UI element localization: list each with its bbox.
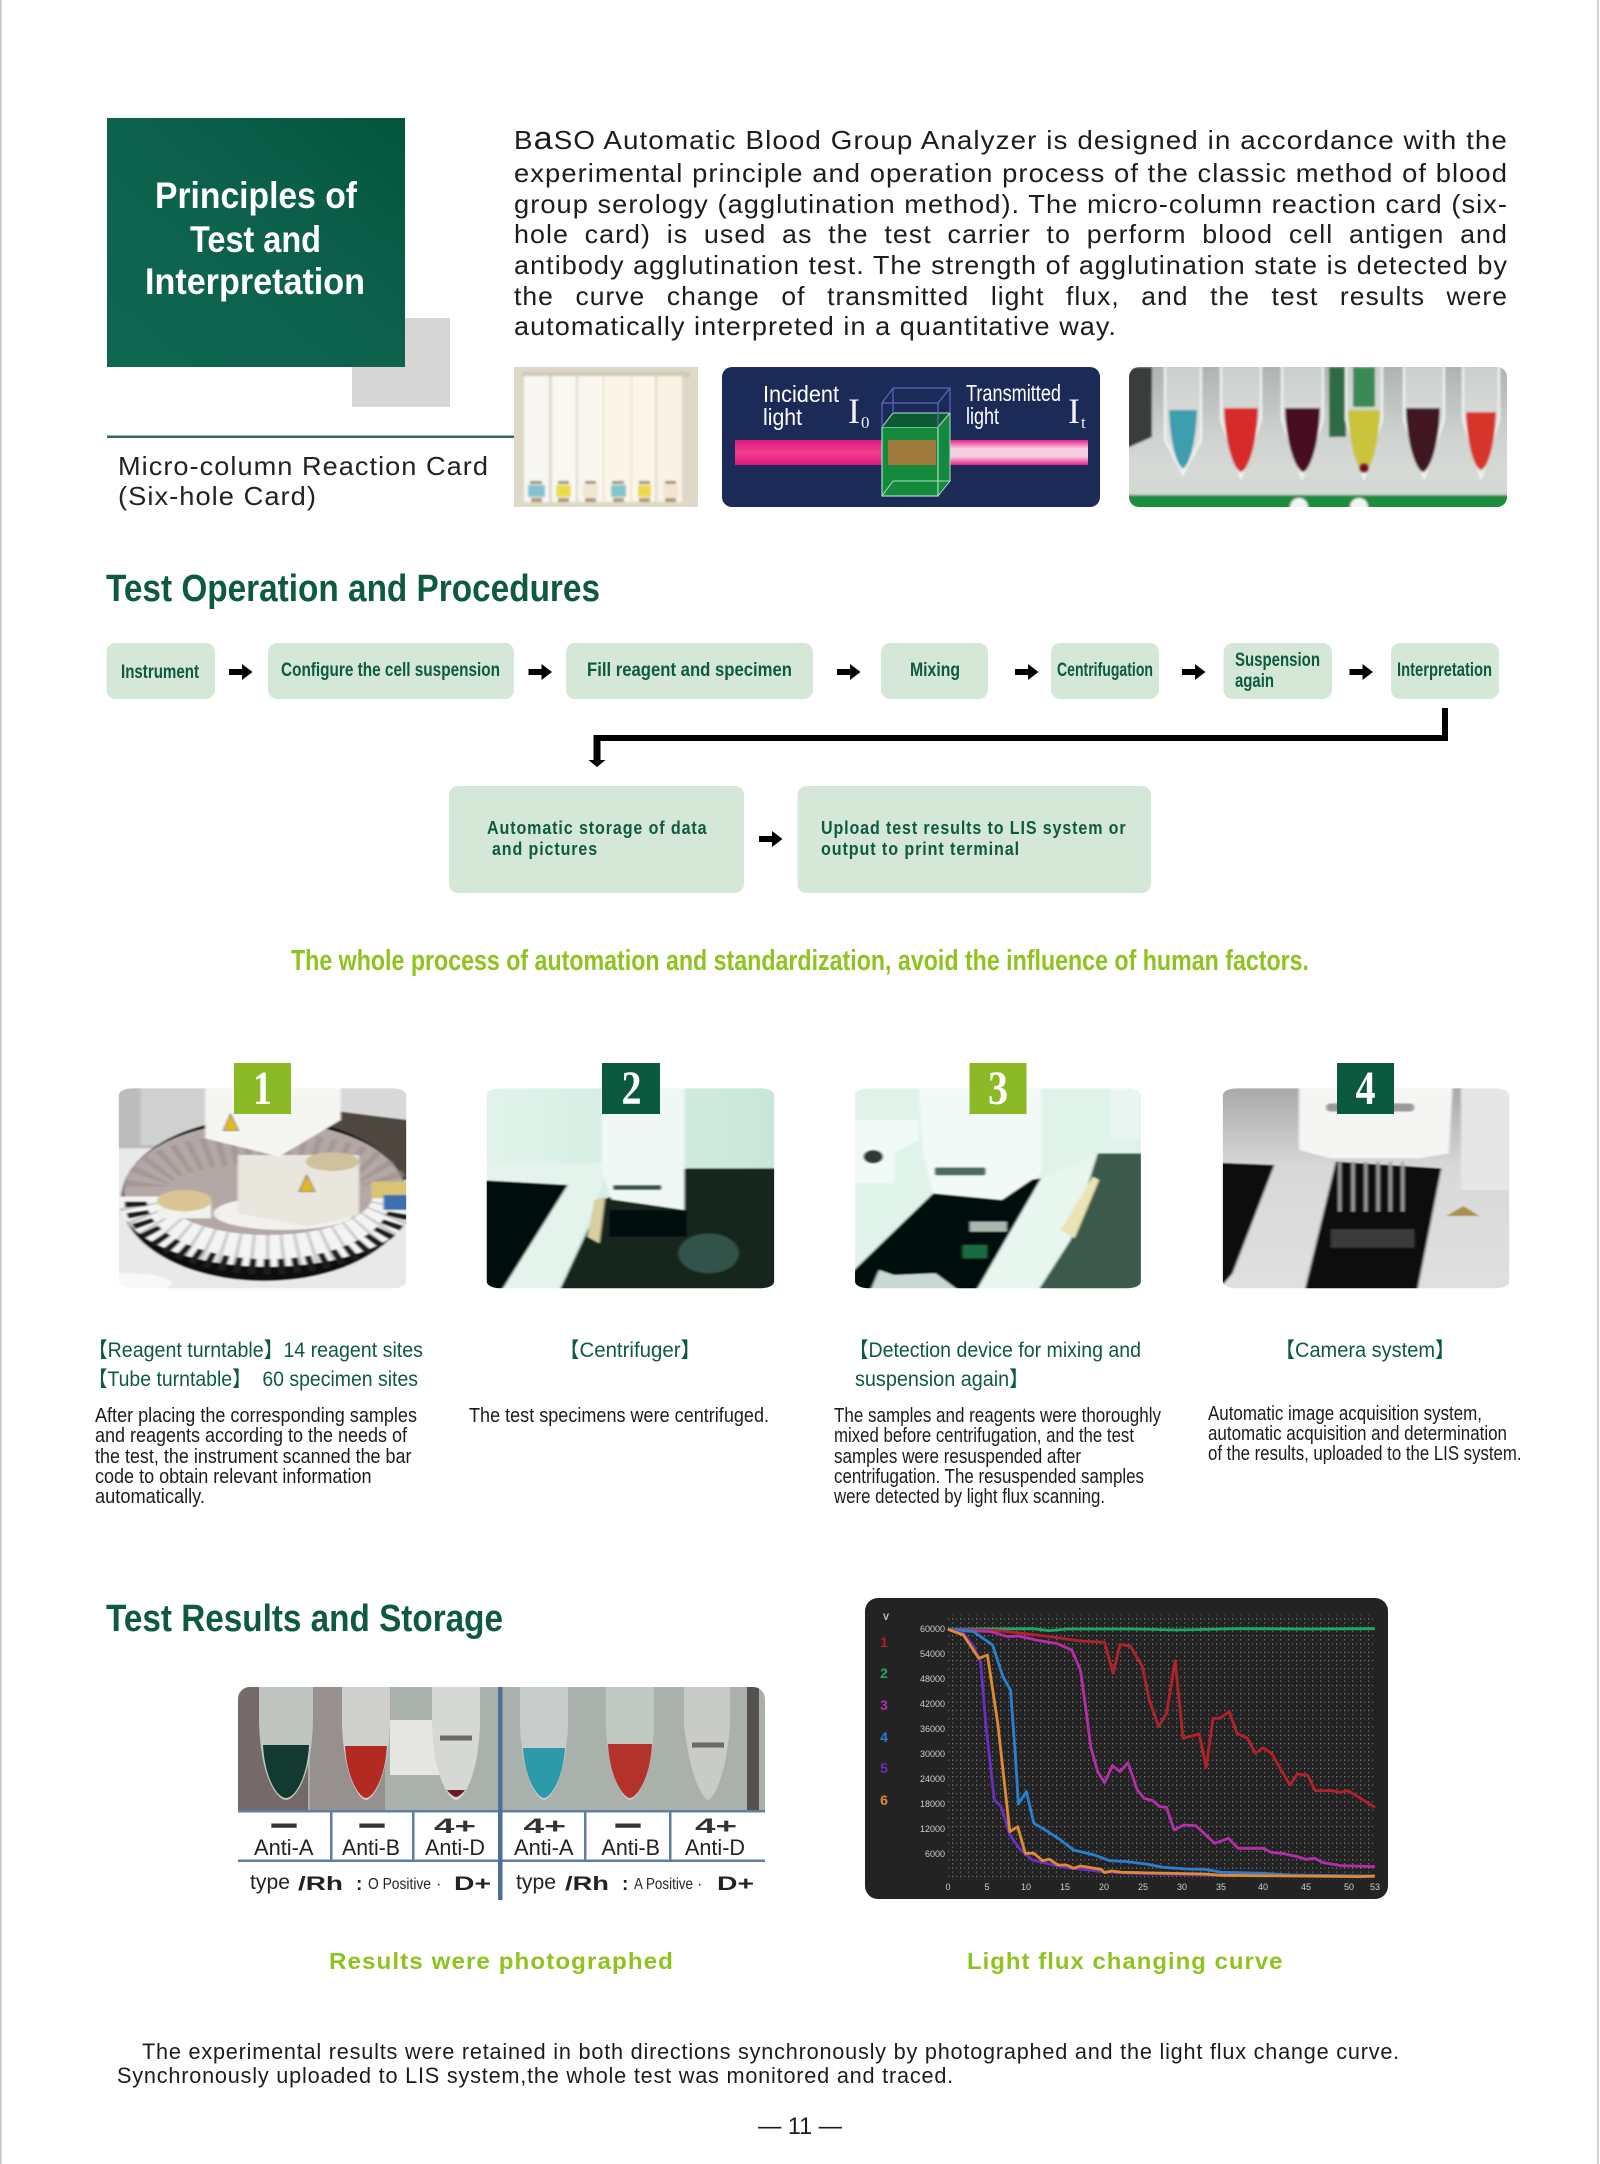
caption: results photographed: Results were photographed [329, 1948, 674, 1974]
flow step: Suspension again [1224, 643, 1332, 699]
closing paragraph: The experimental results were retained in both directions synchronously by photographed and the light flux change curve. [142, 2039, 1400, 2064]
reaction grades [271, 1818, 736, 1833]
x axis labels: 53 [1370, 1882, 1380, 1892]
intro paragraph: the curve change of transmitted light flux, and the test results were [514, 281, 1508, 311]
light transmission diagram: light [966, 403, 999, 429]
antibody labels: Anti-A [254, 1835, 314, 1860]
step 3 description: samples were resuspended after [834, 1446, 1081, 1468]
flow step: Interpretation [1391, 643, 1499, 699]
badge 4: 4 [1356, 1062, 1376, 1115]
step 1 description [95, 1405, 417, 1508]
flow step: Fill reagent and specimen [566, 643, 813, 699]
series legend: V [883, 1612, 889, 1622]
photo: six-hole reaction card [514, 367, 698, 507]
light transmission diagram: 0 [861, 413, 870, 432]
light transmission diagram: light [763, 404, 803, 430]
x axis labels: 40 [1258, 1882, 1268, 1892]
x axis labels: 50 [1344, 1882, 1354, 1892]
incident light beam [735, 440, 882, 465]
arrow 6 [1350, 664, 1373, 680]
badge 2 [602, 1062, 660, 1115]
step 2 caption: 【Centrifuger】 [559, 1339, 701, 1362]
antibody labels: Anti-D [425, 1835, 485, 1860]
flow step: Upload test results: Upload test results to LIS system or [821, 818, 1126, 838]
x axis labels: 35 [1216, 1882, 1226, 1892]
x axis labels: 0 [945, 1882, 951, 1892]
step 3 description: mixed before centrifugation, and the test [834, 1425, 1134, 1447]
light transmission diagram: t [1081, 413, 1086, 432]
arrow 3 [837, 664, 860, 680]
y axis labels [920, 1624, 945, 1859]
heading: Test Operation and Procedures: Test Operation and Procedures [106, 568, 600, 610]
blood type row: : [622, 1874, 628, 1895]
tube photo strip [238, 1687, 765, 1811]
arrow 2 [528, 664, 552, 680]
step 1 captions: 【Reagent turntable】14 reagent sites [88, 1339, 423, 1362]
step 1 description: the test, the instrument scanned the bar [95, 1446, 412, 1468]
flow step: Mixing [881, 643, 988, 699]
step 4 description [1208, 1403, 1522, 1465]
closing paragraph: Synchronously uploaded to LIS system,the whole test was monitored and traced. [117, 2063, 954, 2088]
step 3 description: centrifugation. The resuspended samples [834, 1466, 1144, 1488]
step 1 description: and reagents according to the needs of [95, 1425, 407, 1447]
reaction grades: 4+ [524, 1815, 566, 1838]
micro-column reaction card caption [118, 451, 489, 511]
y axis labels: 18000 [920, 1799, 945, 1809]
step 1 captions: 【Tube turntable】 60 specimen sites [88, 1368, 418, 1391]
reaction grades: — [360, 1808, 384, 1839]
arrow 7 [759, 831, 782, 847]
transmitted light beam [942, 440, 1088, 465]
series legend: 6 [880, 1792, 888, 1808]
badge 3 [970, 1062, 1026, 1115]
antibody labels [254, 1839, 744, 1855]
step 3 description [833, 1405, 1161, 1508]
blood type row: /Rh [298, 1874, 343, 1895]
step 4 description: Automatic image acquisition system, [1208, 1403, 1482, 1425]
flow step: Centrifugation: Centrifugation [1057, 660, 1153, 681]
result photo with antibody table [238, 1687, 765, 1900]
series legend: 1 [880, 1634, 888, 1650]
series legend: 4 [880, 1729, 888, 1745]
y axis labels: 48000 [920, 1674, 945, 1684]
step 2 description: The test specimens were centrifuged. [469, 1405, 769, 1427]
intro paragraph: hole card) is used as the test carrier to perform blood cell antigen and [514, 219, 1508, 249]
connector arrow from Interpretation to storage [588, 708, 1448, 767]
flow step: Interpretation: Interpretation [1397, 660, 1492, 681]
blood type row: /Rh [565, 1874, 609, 1895]
line chart: light flux curve [865, 1598, 1388, 1899]
x axis labels: 15 [1060, 1882, 1070, 1892]
y axis labels: 12000 [920, 1824, 945, 1834]
series legend: 5 [880, 1760, 888, 1776]
arrow 1 [229, 664, 252, 680]
series legend [880, 1612, 889, 1808]
y axis labels: 30000 [920, 1749, 945, 1759]
intro paragraph: group serology (agglutination method). The micro-column reaction card (six- [514, 189, 1508, 219]
title block: Principles of Test and Interpretation: Interpretation [145, 261, 365, 302]
automation tagline: The whole process of automation and standardization, avoid the influence of human factors. [291, 945, 1309, 977]
blood type row: type [250, 1871, 290, 1894]
step 3 description: were detected by light flux scanning. [833, 1486, 1105, 1508]
reaction grades: — [616, 1808, 640, 1839]
table grid [238, 1810, 765, 1862]
light transmission diagram: I [848, 391, 860, 431]
curves [948, 1629, 1375, 1877]
reaction grades: 4+ [695, 1815, 737, 1838]
intro paragraph: BaSO Automatic Blood Group Analyzer is designed in accordance with the [514, 120, 1508, 156]
step 1 captions [88, 1339, 423, 1391]
photo: coloured reaction tubes [1129, 367, 1507, 507]
micro-column reaction card caption: (Six-hole Card) [118, 481, 317, 511]
flow step: Centrifugation [1051, 643, 1159, 699]
blood type row: O Positive [368, 1876, 431, 1893]
x axis labels: 25 [1138, 1882, 1148, 1892]
x axis labels [945, 1882, 1380, 1892]
cuvette [882, 388, 950, 496]
flow step: Upload test results: output to print terminal [821, 839, 1020, 859]
light transmission diagram: I [1068, 391, 1080, 431]
step 1 description: code to obtain relevant information [95, 1466, 372, 1488]
flow step: Automatic storage: and pictures [492, 839, 598, 859]
light transmission diagram: Transmitted [966, 380, 1061, 406]
heading: Test Results and Storage: Test Results and Storage [106, 1598, 503, 1640]
step 3 description: The samples and reagents were thoroughly [834, 1405, 1161, 1427]
title block: Principles of Test and Interpretation [107, 118, 450, 407]
antibody labels: Anti-B [342, 1835, 400, 1860]
y axis labels: 24000 [920, 1774, 945, 1784]
reaction grades: 4+ [434, 1815, 476, 1838]
series legend: 3 [880, 1697, 888, 1713]
flow step: Upload test results [798, 786, 1151, 893]
caption: light flux curve: Light flux changing curve [967, 1948, 1284, 1974]
step 4 description: automatic acquisition and determination [1208, 1423, 1507, 1445]
badge 3: 3 [988, 1062, 1008, 1115]
micro-column reaction card caption: Micro-column Reaction Card [118, 451, 489, 481]
photo 2: centrifuger [486, 1088, 774, 1288]
badge 1: 1 [253, 1062, 272, 1115]
intro paragraph: antibody agglutination test. The strength of agglutination state is detected by [514, 250, 1508, 280]
intro paragraph [514, 120, 1508, 341]
intro paragraph: experimental principle and operation process of the classic method of blood [514, 158, 1508, 188]
step 4 caption: 【Camera system】 [1275, 1339, 1455, 1362]
step 3 captions: 【Detection device for mixing and [849, 1339, 1141, 1362]
flow step: Automatic storage [449, 786, 744, 893]
blood type row: type [516, 1871, 556, 1894]
flow step: Suspension again: Suspension [1235, 650, 1320, 671]
x axis labels: 5 [984, 1882, 990, 1892]
flow step: Fill reagent and specimen: Fill reagent and specimen [587, 660, 792, 681]
title block: Principles of Test and Interpretation: Test and [190, 219, 321, 260]
badge 4 [1337, 1062, 1394, 1115]
closing paragraph [117, 2039, 1400, 2088]
antibody labels: Anti-A [514, 1835, 574, 1860]
y axis labels: 54000 [920, 1649, 945, 1659]
blood type row: D+ [717, 1874, 754, 1895]
badge 2: 2 [622, 1062, 642, 1115]
intro paragraph: automatically interpreted in a quantitative way. [514, 311, 1117, 341]
antibody labels: Anti-D [685, 1835, 745, 1860]
title block: Principles of Test and Interpretation: Principles of [155, 175, 358, 216]
series legend: 2 [880, 1665, 888, 1681]
flow step: Automatic storage: Automatic storage of data [487, 818, 708, 838]
arrow 5 [1182, 664, 1206, 680]
light transmission diagram: Incident [763, 381, 840, 407]
blood type row: D+ [454, 1874, 491, 1895]
photo 1: reagent turntable [118, 1088, 406, 1288]
step 3 captions [849, 1339, 1141, 1391]
x axis labels: 30 [1177, 1882, 1187, 1892]
blood type row [250, 1875, 753, 1894]
step 1 description: automatically. [95, 1486, 205, 1508]
light transmission diagram [722, 367, 1100, 507]
page number: — 11 — [758, 2113, 842, 2140]
y axis labels: 42000 [920, 1699, 945, 1709]
flow step: Configure the cell suspension: Configure the cell suspension [281, 660, 500, 681]
arrow 4 [1015, 664, 1038, 680]
flow step: Suspension again: again [1235, 671, 1274, 692]
blood type row: A Positive [634, 1876, 693, 1893]
step 4 description: of the results, uploaded to the LIS system. [1208, 1443, 1522, 1465]
blood type row: · [436, 1876, 441, 1893]
flow step: Mixing: Mixing [910, 660, 960, 681]
reaction grades: — [272, 1808, 296, 1839]
x axis labels: 20 [1099, 1882, 1109, 1892]
flow step: Configure the cell suspension [268, 643, 514, 699]
y axis labels: 6000 [925, 1849, 945, 1859]
photo 3: detection device [847, 1083, 1149, 1293]
x axis labels: 45 [1301, 1882, 1311, 1892]
step 3 captions: suspension again】 [855, 1368, 1029, 1391]
panel divider [498, 1687, 502, 1900]
badge 1 [234, 1062, 291, 1115]
y axis labels: 36000 [920, 1724, 945, 1734]
flow step: Instrument [106, 643, 215, 699]
y axis labels: 60000 [920, 1624, 945, 1634]
step 1 description: After placing the corresponding samples [95, 1405, 417, 1427]
photo 4: camera system [1216, 1083, 1518, 1293]
x axis labels: 10 [1021, 1882, 1031, 1892]
flow step: Instrument: Instrument [121, 662, 200, 683]
blood type row: · [697, 1876, 702, 1893]
rule under title [107, 436, 514, 438]
antibody labels: Anti-B [602, 1835, 660, 1860]
blood type row: : [356, 1874, 362, 1895]
